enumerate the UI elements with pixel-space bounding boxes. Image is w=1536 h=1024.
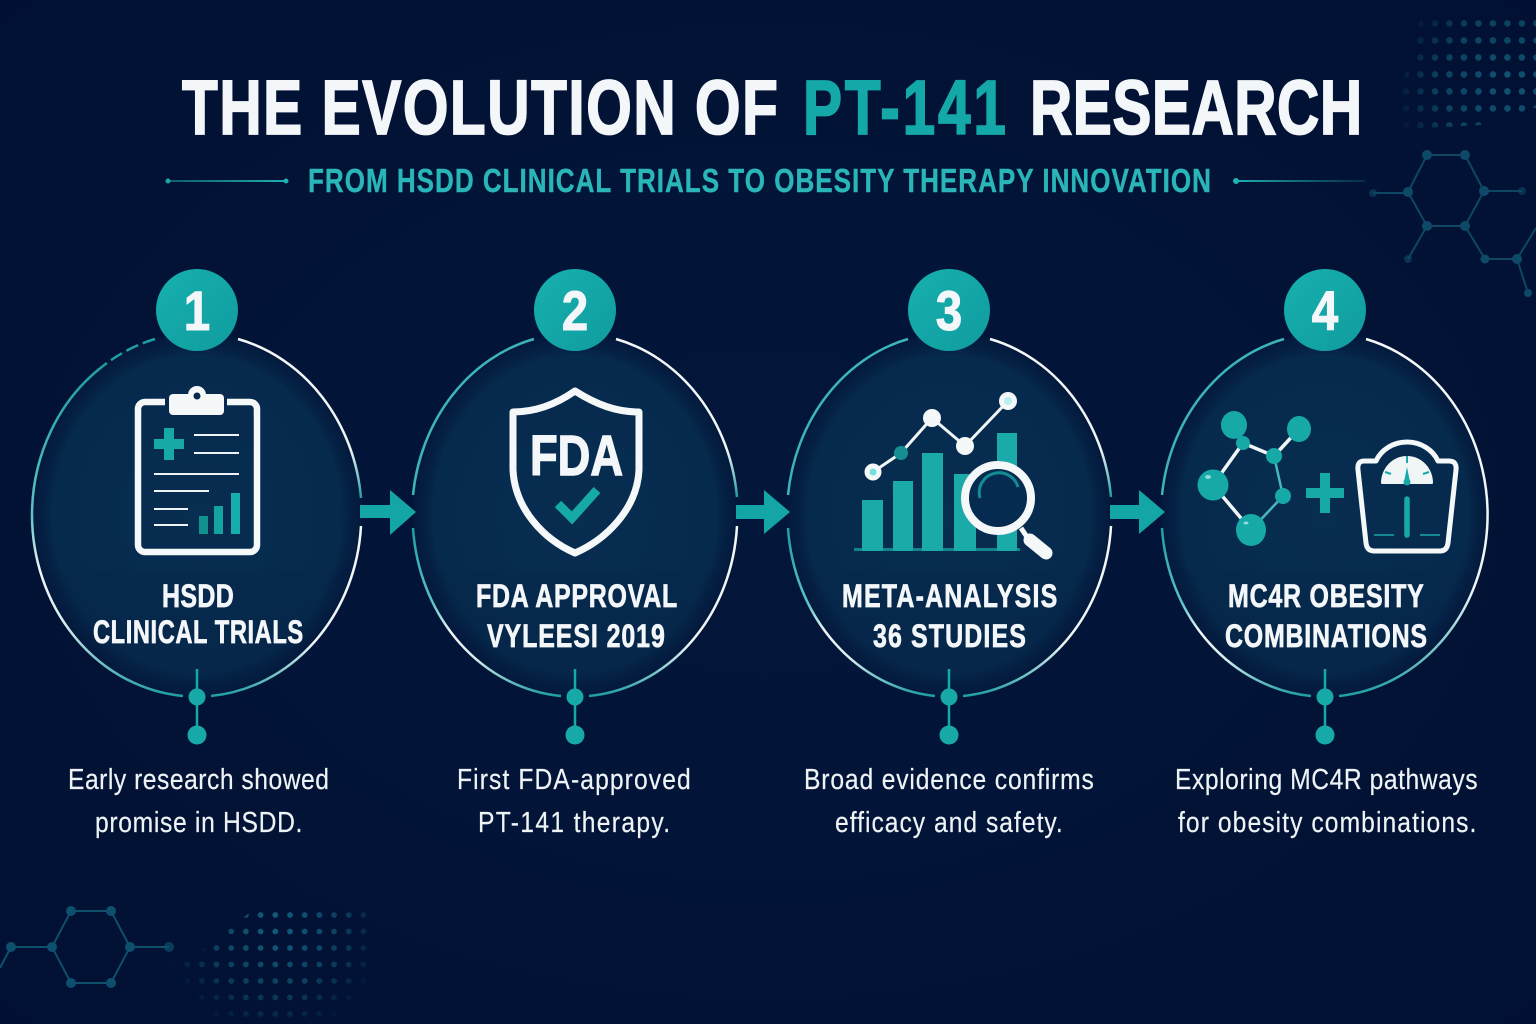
- step 2 label: VYLEESI 2019: [487, 619, 665, 655]
- step 2 description: [457, 763, 691, 838]
- step 2 connector: [566, 669, 584, 744]
- arrow 2: [736, 490, 790, 534]
- title: [182, 65, 1362, 151]
- step 3 ring: [788, 339, 1111, 696]
- step 1 description: Early research showed: [68, 763, 329, 795]
- step 4 description: Exploring MC4R pathways: [1175, 763, 1478, 795]
- step 2 number badge: [534, 269, 616, 351]
- step 3 number badge: 3: [936, 280, 962, 343]
- step 2 number badge: 2: [562, 280, 588, 343]
- step 1 disc: [32, 333, 362, 697]
- step 3 label: META-ANALYSIS: [842, 579, 1057, 615]
- step 1 number badge: [156, 269, 238, 351]
- step 4 description: for obesity combinations.: [1178, 806, 1476, 838]
- subtitle: FROM HSDD CLINICAL TRIALS TO OBESITY THERAPY INNOVATION: [308, 163, 1211, 200]
- step 3 label: 36 STUDIES: [873, 619, 1026, 655]
- subtitle rule right: [1233, 178, 1365, 184]
- step 3 connector: [940, 669, 958, 744]
- step 3 disc: [787, 333, 1111, 697]
- step 2 label: [476, 579, 677, 655]
- step 2 label: FDA APPROVAL: [476, 579, 677, 615]
- title: RESEARCH: [1030, 65, 1362, 151]
- decoration: top-right molecule and dots: [1369, 20, 1536, 297]
- step 2 panel: [413, 269, 737, 838]
- step 2 ring: [413, 339, 737, 696]
- step 4 disc: [1161, 333, 1489, 697]
- step 3 description: Broad evidence confirms: [804, 763, 1094, 795]
- step 3 panel: [787, 269, 1111, 838]
- decoration: bottom-left molecule and dots: [0, 905, 370, 1024]
- step 1 label: HSDD: [162, 579, 234, 615]
- step 2 disc: [413, 333, 737, 697]
- step 1 number badge: 1: [184, 280, 210, 343]
- step 1 description: [68, 763, 329, 838]
- step 1 ring: [32, 339, 361, 696]
- step 1 description: promise in HSDD.: [95, 806, 302, 838]
- step 4 label: MC4R OBESITY: [1228, 579, 1424, 615]
- step 4 number badge: 4: [1312, 280, 1338, 343]
- step 3 description: efficacy and safety.: [835, 806, 1063, 838]
- step 4 panel: [1161, 269, 1489, 838]
- step 1 label: [93, 579, 303, 650]
- step 4 ring: [1162, 339, 1488, 696]
- icon: clipboard: [138, 386, 257, 552]
- title: THE EVOLUTION OF: [182, 65, 778, 151]
- step 2 description: First FDA-approved: [457, 763, 691, 795]
- icon: FDA shield: [513, 391, 639, 553]
- step 4 label: [1225, 579, 1427, 655]
- arrow 1: [360, 490, 416, 535]
- icon: molecule: [1198, 411, 1311, 546]
- step 3 description: [804, 763, 1094, 838]
- icon: plus: [1306, 473, 1344, 513]
- subtitle rule left: [166, 178, 288, 184]
- step 1 panel: [32, 269, 362, 838]
- arrow 3: [1110, 490, 1165, 534]
- icon: FDA shield: FDA: [530, 424, 623, 488]
- step 4 number badge: [1284, 269, 1366, 351]
- step 3 number badge: [908, 269, 990, 351]
- step 4 label: COMBINATIONS: [1225, 619, 1427, 655]
- icon: bar chart with magnifier: [854, 392, 1046, 553]
- icon: weighing scale: [1358, 442, 1456, 551]
- step 3 label: [842, 579, 1057, 655]
- step 4 connector: [1316, 669, 1334, 744]
- step 4 description: [1175, 763, 1478, 838]
- step 1 connector: [188, 669, 206, 744]
- title: PT-141: [803, 65, 1006, 151]
- step 2 description: PT-141 therapy.: [478, 806, 670, 838]
- step 1 label: CLINICAL TRIALS: [93, 615, 303, 650]
